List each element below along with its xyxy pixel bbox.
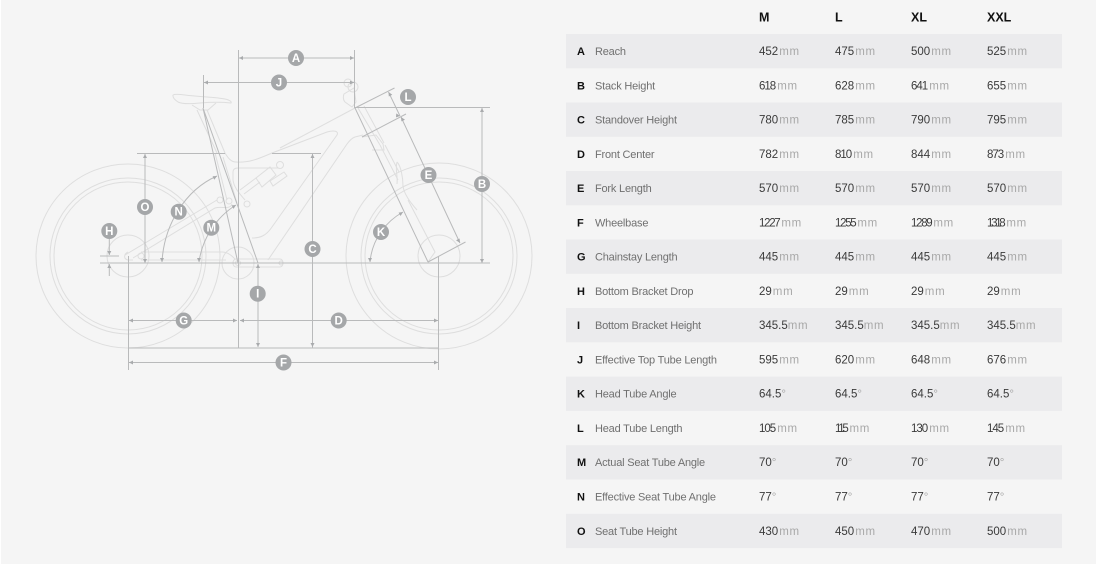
row A: Reach <box>566 34 1062 68</box>
row J: Effective Top Tube Length: Effective Top Tube Length <box>595 354 717 366</box>
row D: Front Center: 782mm <box>759 149 800 161</box>
row K: Head Tube Angle: 64.5° <box>987 389 1015 401</box>
row G: Chainstay Length <box>566 240 1062 274</box>
row L: Head Tube Length: 105mm <box>759 423 798 435</box>
row J: Effective Top Tube Length: J <box>577 354 583 366</box>
row K: Head Tube Angle <box>566 377 1062 411</box>
badge C <box>304 241 320 257</box>
row E: Fork Length: Fork Length <box>595 183 652 195</box>
badge I: I <box>256 289 259 301</box>
badge E: E <box>425 170 433 182</box>
row L: Head Tube Length: L <box>577 423 584 435</box>
row A: Reach: 500mm <box>911 46 952 58</box>
row G: Chainstay Length: G <box>577 252 586 264</box>
row H: Bottom Bracket Drop: Bottom Bracket Drop <box>595 286 693 298</box>
row H: Bottom Bracket Drop: 29mm <box>987 286 1021 298</box>
badge H <box>101 223 117 239</box>
row J: Effective Top Tube Length: 676mm <box>987 354 1028 366</box>
row N: Effective Seat Tube Angle <box>577 492 1005 504</box>
row A: Reach: Reach <box>595 46 626 58</box>
row E: Fork Length: E <box>577 183 584 195</box>
row A: Reach: 525mm <box>987 46 1028 58</box>
row D: Front Center: 844mm <box>911 149 952 161</box>
row G: Chainstay Length: 445mm <box>987 252 1028 264</box>
row B: Stack Height: Stack Height <box>595 80 655 92</box>
row C: Standover Height: 790mm <box>911 114 952 126</box>
row D: Front Center: 873mm <box>987 149 1026 161</box>
dimension lines and arrows <box>100 50 490 370</box>
row C: Standover Height: Standover Height <box>595 114 677 126</box>
row J: Effective Top Tube Length: 620mm <box>835 354 876 366</box>
row M: Actual Seat Tube Angle: Actual Seat Tube Angle <box>595 457 705 469</box>
row N: Effective Seat Tube Angle: Effective Seat Tube Angle <box>595 492 716 504</box>
geometry table <box>566 10 1062 548</box>
row B: Stack Height <box>577 80 1028 92</box>
row C: Standover Height: C <box>577 114 585 126</box>
row F: Wheelbase: Wheelbase <box>595 217 648 229</box>
table header: sizes <box>759 10 1012 24</box>
badge C: C <box>308 244 317 256</box>
row D: Front Center: D <box>577 149 585 161</box>
row O: Seat Tube Height: O <box>577 526 586 538</box>
row M: Actual Seat Tube Angle <box>566 445 1062 480</box>
badge J <box>271 74 287 90</box>
row B: Stack Height: 628mm <box>835 80 876 92</box>
row F: Wheelbase: F <box>577 217 584 229</box>
row F: Wheelbase: 1318 mm <box>987 217 1027 229</box>
row D: Front Center: 810mm <box>835 149 874 161</box>
badge N <box>171 204 187 220</box>
row F: Wheelbase: 1227mm <box>759 217 802 229</box>
badge M: M <box>207 223 216 235</box>
row K: Head Tube Angle: 64.5° <box>911 389 939 401</box>
row A: Reach: A <box>577 46 585 58</box>
row B: Stack Height: B <box>577 80 585 92</box>
table header: sizes: XL <box>911 10 927 24</box>
row N: Effective Seat Tube Angle: 77° <box>759 492 777 504</box>
bike: front wheel <box>346 163 532 349</box>
row J: Effective Top Tube Length: 648mm <box>911 354 952 366</box>
row B: Stack Height: 618mm <box>759 80 798 92</box>
row F: Wheelbase <box>577 217 1027 229</box>
row F: Wheelbase: 1289mm <box>911 217 954 229</box>
row N: Effective Seat Tube Angle: 77° <box>835 492 853 504</box>
row M: Actual Seat Tube Angle: 70° <box>911 457 929 469</box>
badge M <box>203 220 219 236</box>
badge F: F <box>280 358 287 370</box>
row E: Fork Length: 570mm <box>911 183 952 195</box>
row G: Chainstay Length: 445mm <box>835 252 876 264</box>
badge K: K <box>377 227 386 239</box>
row C: Standover Height: 795mm <box>987 114 1028 126</box>
row H: Bottom Bracket Drop: 29mm <box>759 286 793 298</box>
row O: Seat Tube Height: 450mm <box>835 526 876 538</box>
badge N: N <box>175 207 183 219</box>
badge B: B <box>478 179 486 191</box>
row C: Standover Height: 780mm <box>759 114 800 126</box>
row G: Chainstay Length: Chainstay Length <box>595 252 677 264</box>
row K: Head Tube Angle: K <box>577 389 585 401</box>
badge G <box>176 312 192 328</box>
badge D: D <box>335 316 343 328</box>
row M: Actual Seat Tube Angle: 70° <box>759 457 777 469</box>
row I: Bottom Bracket Height: 345.5mm <box>835 320 884 332</box>
badge D <box>331 312 347 328</box>
badge O <box>137 199 153 215</box>
badge K <box>373 224 389 240</box>
row D: Front Center <box>577 149 1026 161</box>
table header: sizes: XXL <box>987 10 1012 24</box>
badge G: G <box>179 316 188 328</box>
badge B <box>474 176 490 192</box>
row I: Bottom Bracket Height: I <box>577 320 580 332</box>
row K: Head Tube Angle: 64.5° <box>835 389 863 401</box>
row K: Head Tube Angle: Head Tube Angle <box>595 389 676 401</box>
row O: Seat Tube Height: 470mm <box>911 526 952 538</box>
row M: Actual Seat Tube Angle: 70° <box>987 457 1005 469</box>
row E: Fork Length <box>566 171 1062 205</box>
row L: Head Tube Length: Head Tube Length <box>595 423 682 435</box>
badge H: H <box>105 226 113 238</box>
badge A: A <box>292 53 300 65</box>
row O: Seat Tube Height: 500mm <box>987 526 1028 538</box>
badge I <box>250 286 266 302</box>
row I: Bottom Bracket Height: Bottom Bracket Height <box>595 320 701 332</box>
row H: Bottom Bracket Drop: 29mm <box>835 286 869 298</box>
row B: Stack Height: 655mm <box>987 80 1028 92</box>
row O: Seat Tube Height: Seat Tube Height <box>595 526 677 538</box>
row L: Head Tube Length: 130mm <box>911 423 950 435</box>
row H: Bottom Bracket Drop <box>577 286 1021 298</box>
row A: Reach: 452mm <box>759 46 800 58</box>
row D: Front Center: Front Center <box>595 149 655 161</box>
table header: sizes: L <box>835 10 843 24</box>
row H: Bottom Bracket Drop: H <box>577 286 585 298</box>
bike geometry diagram <box>36 50 532 370</box>
badge O: O <box>141 202 150 214</box>
row O: Seat Tube Height: 430mm <box>759 526 800 538</box>
table header: sizes: M <box>759 10 769 24</box>
row I: Bottom Bracket Height: 345.5mm <box>911 320 960 332</box>
row E: Fork Length: 570mm <box>987 183 1028 195</box>
row N: Effective Seat Tube Angle: 77° <box>911 492 929 504</box>
row A: Reach: 475mm <box>835 46 876 58</box>
row I: Bottom Bracket Height: 345.5mm <box>987 320 1036 332</box>
row N: Effective Seat Tube Angle: N <box>577 492 585 504</box>
row N: Effective Seat Tube Angle: 77° <box>987 492 1005 504</box>
row F: Wheelbase: 1255mm <box>835 217 878 229</box>
row I: Bottom Bracket Height <box>566 308 1062 342</box>
row G: Chainstay Length: 445mm <box>759 252 800 264</box>
badge F <box>276 354 292 370</box>
badge E <box>420 167 436 183</box>
bike: frame and components <box>125 79 435 279</box>
row M: Actual Seat Tube Angle: 70° <box>835 457 853 469</box>
row C: Standover Height: 785mm <box>835 114 876 126</box>
row B: Stack Height: 641mm <box>911 80 950 92</box>
row E: Fork Length: 570mm <box>759 183 800 195</box>
row L: Head Tube Length: 115 mm <box>835 423 870 435</box>
row E: Fork Length: 570mm <box>835 183 876 195</box>
row J: Effective Top Tube Length: 595mm <box>759 354 800 366</box>
badge L: L <box>404 92 412 104</box>
row H: Bottom Bracket Drop: 29mm <box>911 286 945 298</box>
row G: Chainstay Length: 445mm <box>911 252 952 264</box>
row I: Bottom Bracket Height: 345.5mm <box>759 320 808 332</box>
row J: Effective Top Tube Length <box>577 354 1028 366</box>
row C: Standover Height <box>566 102 1062 137</box>
bike: rear wheel <box>36 164 220 348</box>
row O: Seat Tube Height <box>566 514 1062 548</box>
row L: Head Tube Length: 145mm <box>987 423 1026 435</box>
row L: Head Tube Length <box>577 423 1026 435</box>
arrowheads <box>107 56 484 364</box>
row M: Actual Seat Tube Angle: M <box>577 457 586 469</box>
badge L <box>400 89 416 105</box>
row K: Head Tube Angle: 64.5° <box>759 389 787 401</box>
badge J: J <box>276 78 282 90</box>
badge A <box>288 50 304 66</box>
